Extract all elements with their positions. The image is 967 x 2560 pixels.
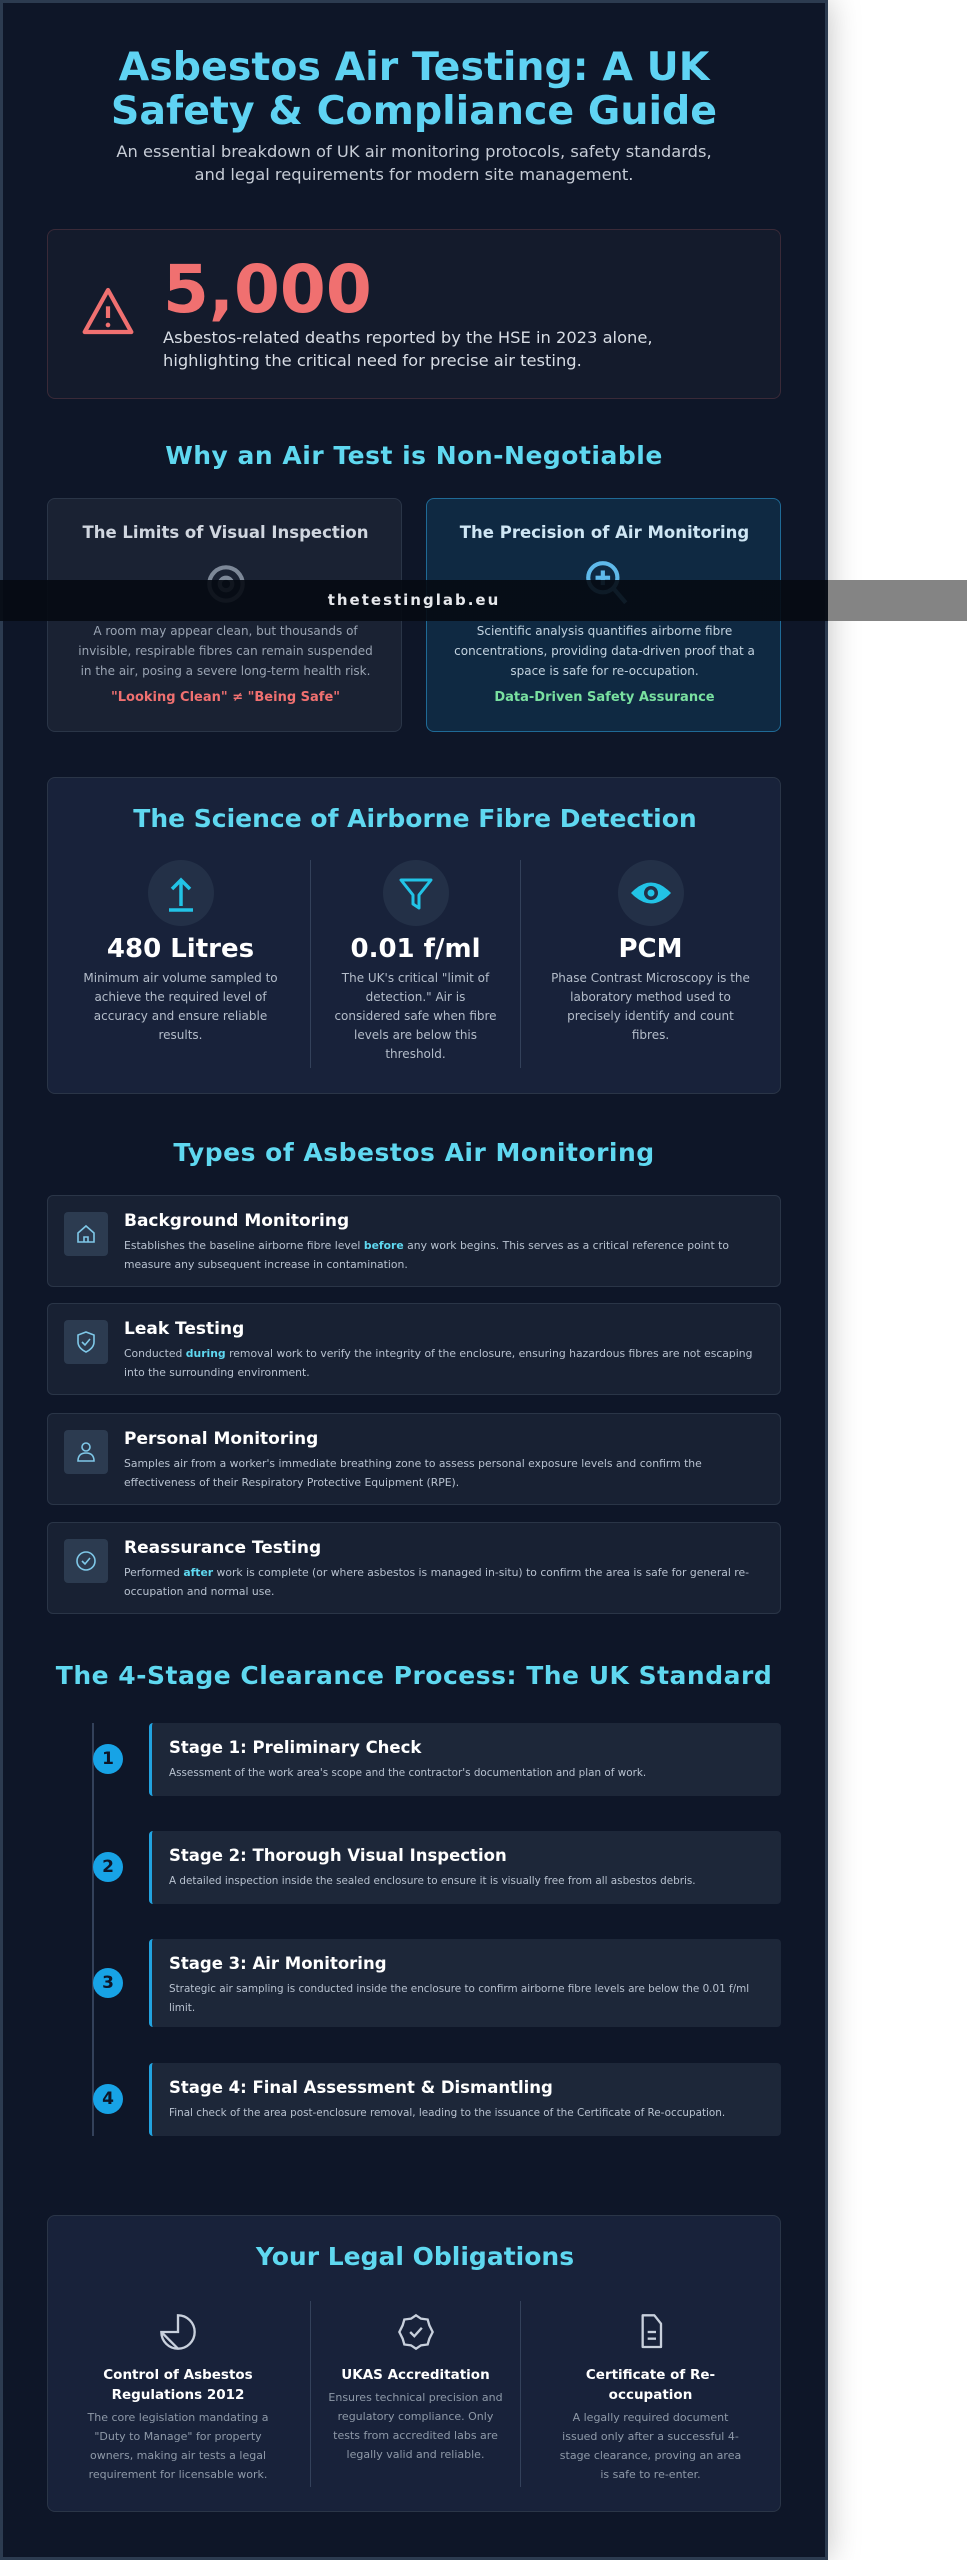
type: reassurance: Reassurance Testing (124, 1538, 321, 1558)
legal item: certificate (560, 2314, 741, 2481)
number 1 (93, 1744, 123, 1774)
title: Asbestos Air Testing: A UK (119, 44, 709, 90)
type: leak (47, 1303, 781, 1395)
subtitle (116, 142, 712, 184)
stage 1: Stage 1: Preliminary Check (169, 1738, 421, 1757)
subtitle: and legal requirements for modern site management. (195, 165, 633, 184)
panel: visual inspection (47, 498, 402, 732)
icon: chart (160, 2314, 196, 2350)
number 1: 1 (102, 1749, 114, 1769)
stat number: 5,000 (163, 251, 372, 328)
number 2 (93, 1852, 123, 1882)
heading: 4-stage: The 4-Stage Clearance Process: The UK Standard (56, 1661, 772, 1690)
type: background: Background Monitoring (124, 1211, 349, 1231)
panel: science (47, 777, 781, 1094)
number 2: 2 (102, 1857, 114, 1877)
stat: PCM: Phase Contrast Microscopy is the laboratory method used to precisely identify and count fibres. (551, 971, 750, 1042)
panel: air monitoring: Scientific analysis quantifies airborne fibre concentrations, providing data-driven proof that a space is safe for re-occupation. (454, 624, 755, 678)
type: background: Establishes the baseline airborne fibre level before any work begins. This serves as a critical reference point to measure any subsequent increase in contamination. (124, 1239, 729, 1270)
icon: eye off (208, 565, 244, 602)
type: personal (47, 1413, 781, 1505)
type: personal: Samples air from a worker's immediate breathing zone to assess personal exposure levels and confirm the effectiveness of their Respiratory Protective Equipment (RPE). (124, 1457, 702, 1488)
stat description: highlighting the critical need for precise air testing. (163, 351, 582, 370)
panel: visual inspection: A room may appear clean, but thousands of invisible, respirable fibres can remain suspended in the air, posing a severe long-term health risk. (78, 624, 373, 678)
heading: types: Types of Asbestos Air Monitoring (173, 1138, 655, 1167)
stage 3: Stage 3: Air Monitoring (169, 1954, 387, 1973)
stat: 480 litres: Minimum air volume sampled to achieve the required level of accuracy and ensure reliable results. (83, 971, 278, 1042)
type: reassurance (47, 1522, 781, 1614)
heading: why: Why an Air Test is Non-Negotiable (165, 441, 663, 470)
legal item: regulations (88, 2314, 268, 2481)
heading: science: The Science of Airborne Fibre Detection (133, 804, 697, 833)
title: Safety & Compliance Guide (111, 88, 717, 134)
panel: visual inspection: "Looking Clean" ≠ "Being Safe" (111, 690, 340, 705)
panel: visual inspection: The Limits of Visual Inspection (82, 523, 369, 542)
legal item: certificate: A legally required document issued only after a successful 4-stage clearance, proving an area is safe to re-enter. (560, 2411, 741, 2481)
panel: air monitoring: Data-Driven Safety Assurance (494, 690, 715, 705)
stage 2: A detailed inspection inside the sealed enclosure to ensure it is visually free from all asbestos debris. (169, 1875, 696, 1887)
stat description: Asbestos-related deaths reported by the HSE in 2023 alone, (163, 328, 653, 347)
stage 2 (149, 1831, 781, 1904)
stat callout (47, 229, 781, 399)
title (111, 44, 717, 134)
type: leak: Leak Testing (124, 1319, 244, 1339)
stat description (163, 328, 653, 370)
legal item: regulations: Regulations 2012 (112, 2387, 244, 2403)
stage 4 (149, 2063, 781, 2136)
heading: legal: Your Legal Obligations (256, 2242, 574, 2271)
stage 4: Stage 4: Final Assessment & Dismantling (169, 2078, 553, 2097)
legal item: UKAS (328, 2314, 503, 2461)
stat: 480 litres (83, 860, 278, 1042)
icon: magnifier (586, 561, 627, 604)
panel: air monitoring (426, 498, 781, 732)
panel: air monitoring: The Precision of Air Monitoring (460, 523, 749, 542)
icon: upload (148, 860, 214, 926)
number 4: 4 (102, 2089, 114, 2109)
legal item: certificate: Certificate of Re- (586, 2367, 715, 2383)
type: background (47, 1195, 781, 1287)
number 3 (93, 1968, 123, 1998)
stat: 480 litres: 480 Litres (107, 934, 254, 964)
legal item: certificate: occupation (609, 2387, 692, 2403)
stat: PCM: PCM (618, 934, 682, 964)
stat: 0.01 f/ml (334, 860, 497, 1061)
type: reassurance: Performed after work is complete (or where asbestos is managed in-situ) to confirm the area is safe for general re-occupation and normal use. (124, 1566, 749, 1598)
icon: badge (398, 2314, 434, 2350)
stage 3: Strategic air sampling is conducted inside the enclosure to confirm airborne fibre levels are below the 0.01 f/ml limit. (169, 1983, 749, 2014)
stage 1 (149, 1723, 781, 1796)
type: leak: Conducted during removal work to verify the integrity of the enclosure, ensuring hazardous fibres are not escaping into the surrounding environment. (124, 1347, 752, 1378)
stage 2: Stage 2: Thorough Visual Inspection (169, 1846, 507, 1865)
legal item: UKAS: UKAS Accreditation (341, 2367, 490, 2383)
watermark band: thetestinglab.eu (328, 591, 500, 609)
icon: document (642, 2314, 662, 2348)
legal item: UKAS: Ensures technical precision and regulatory compliance. Only tests from accredited labs are legally valid and reliable. (328, 2391, 503, 2461)
icon: funnel (383, 860, 449, 926)
stat: PCM (551, 860, 750, 1042)
stat: 0.01 f/ml: 0.01 f/ml (350, 934, 480, 964)
stage 4: Final check of the area post-enclosure removal, leading to the issuance of the Certificate of Re-occupation. (169, 2107, 725, 2119)
icon: warning (82, 288, 134, 334)
stat: 0.01 f/ml: The UK's critical "limit of detection." Air is considered safe when fibre levels are below this threshold. (334, 971, 497, 1061)
icon: eye (618, 860, 684, 926)
number 3: 3 (102, 1973, 114, 1993)
type: personal: Personal Monitoring (124, 1429, 318, 1449)
panel: legal (47, 2215, 781, 2512)
legal item: regulations: Control of Asbestos (103, 2367, 253, 2383)
subtitle: An essential breakdown of UK air monitoring protocols, safety standards, (116, 142, 712, 161)
stage 1: Assessment of the work area's scope and the contractor's documentation and plan of work. (169, 1767, 646, 1779)
number 4 (93, 2084, 123, 2114)
legal item: regulations: The core legislation mandating a "Duty to Manage" for property owners, making air tests a legal requirement for licensable work. (88, 2411, 268, 2481)
watermark band (0, 580, 967, 621)
stage 3 (149, 1939, 781, 2027)
